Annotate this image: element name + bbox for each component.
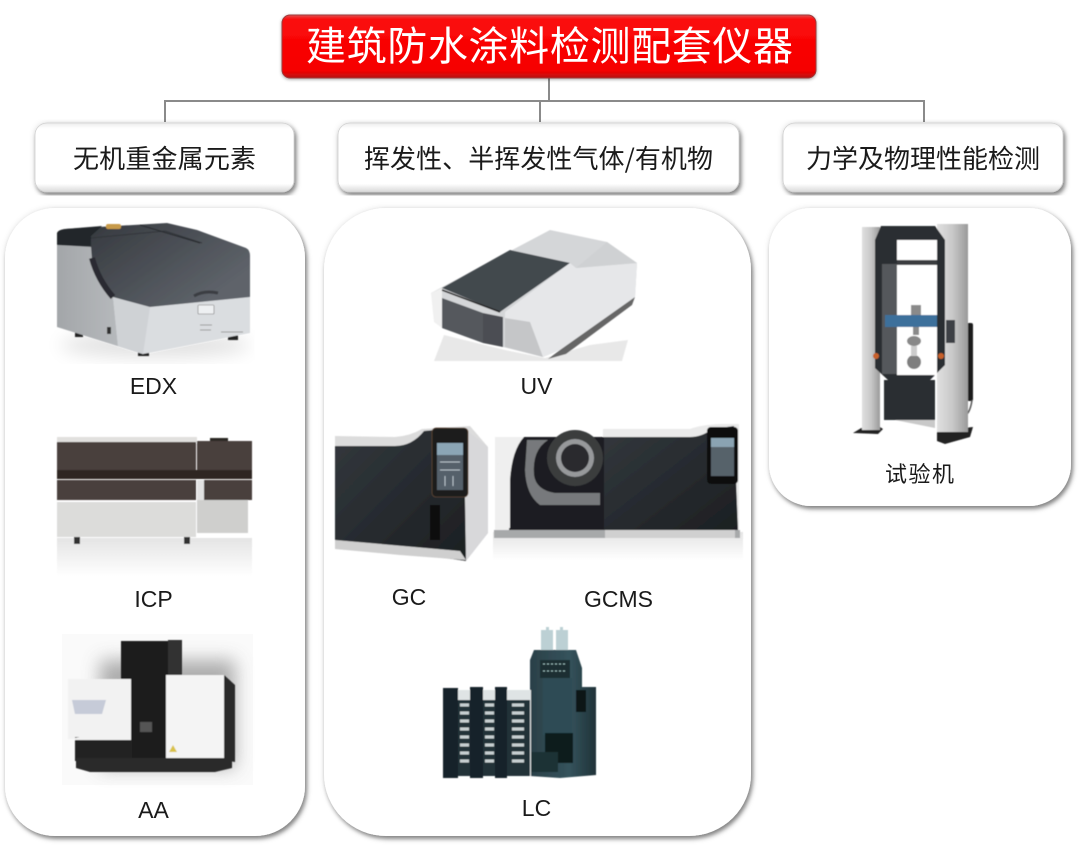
label: ICP: ICP bbox=[134, 586, 173, 612]
connector lines bbox=[165, 78, 924, 122]
panel: inorganic instruments bbox=[5, 208, 305, 836]
category box: mechanical properties: 力学及物理性能检测 bbox=[806, 139, 1040, 176]
instrument: AA bbox=[62, 634, 253, 785]
instrument: UV bbox=[431, 230, 637, 361]
instrument: ICP bbox=[57, 437, 252, 576]
label: GC: GC bbox=[392, 584, 426, 610]
category box: inorganic heavy metals bbox=[35, 123, 294, 192]
label: testing machine: 试验机 bbox=[885, 457, 954, 489]
category box: volatile organics bbox=[338, 123, 739, 192]
instrument: GCMS bbox=[493, 424, 743, 560]
label: EDX: EDX bbox=[130, 373, 177, 399]
instrument: GC bbox=[335, 426, 488, 561]
title box: 建筑防水涂料检测配套仪器 bbox=[306, 14, 793, 72]
label: AA: AA bbox=[138, 797, 169, 823]
instrument: testing machine bbox=[853, 224, 973, 444]
category box: mechanical properties bbox=[783, 123, 1063, 192]
instrument: LC bbox=[443, 627, 596, 778]
panel: mechanical testing bbox=[769, 208, 1071, 506]
label: UV: UV bbox=[521, 373, 553, 399]
panel: volatile organics instruments bbox=[324, 208, 751, 836]
instrument: EDX bbox=[57, 223, 250, 357]
category box: volatile organics: 挥发性、半挥发性气体/有机物 bbox=[364, 139, 713, 176]
category box: inorganic heavy metals: 无机重金属元素 bbox=[73, 139, 256, 176]
label: GCMS: GCMS bbox=[584, 586, 653, 612]
label: LC: LC bbox=[522, 795, 551, 821]
